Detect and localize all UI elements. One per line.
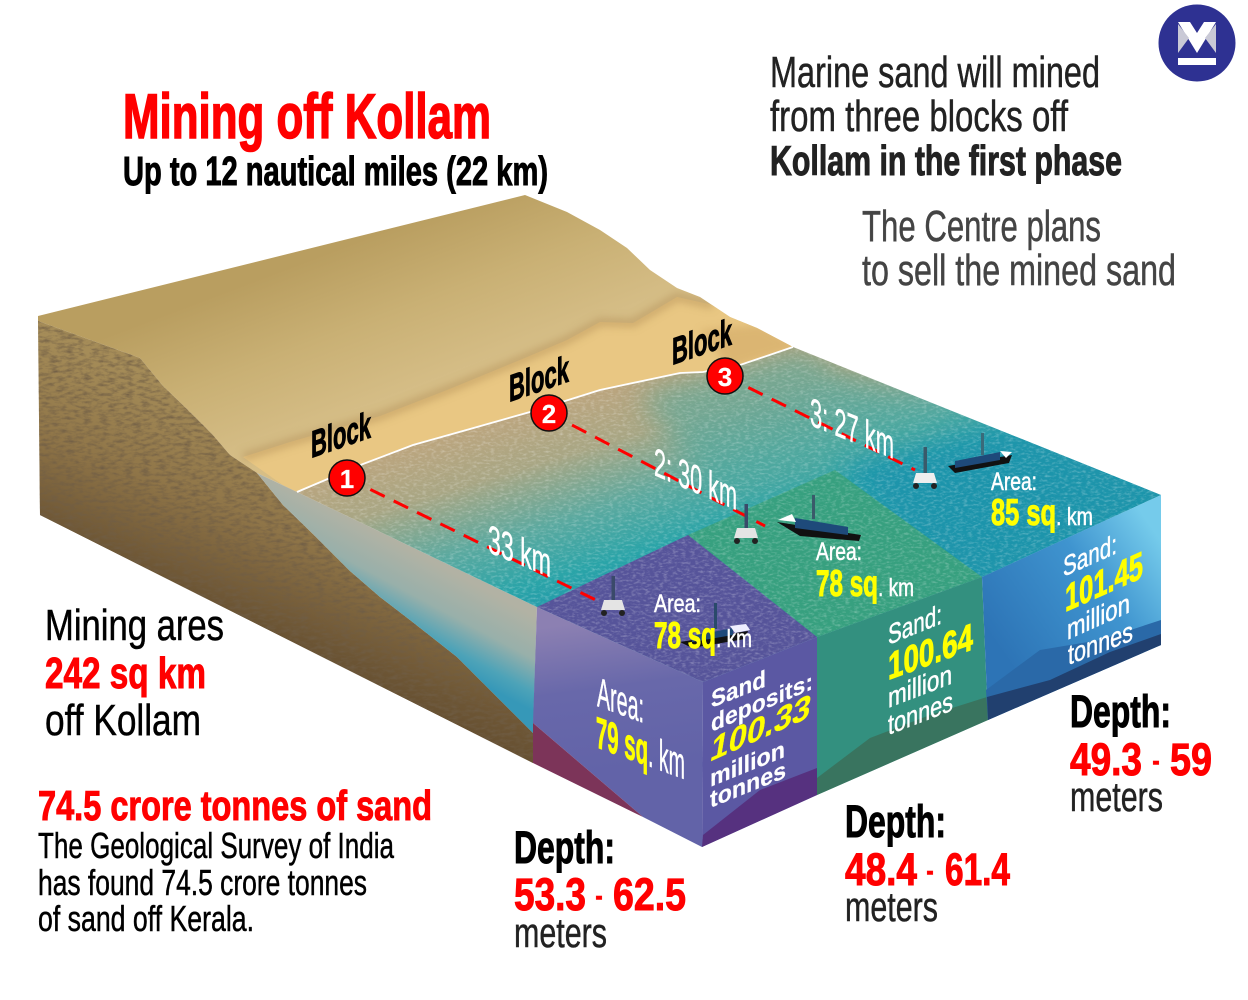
icon: ship 3	[948, 433, 1012, 473]
text block: sand estimate	[38, 782, 432, 939]
block marker 1: Block	[311, 404, 371, 467]
block 1 surface area: 78 sq	[654, 615, 716, 656]
block 2 front face	[817, 577, 988, 795]
block 1 sand deposits: deposits:	[711, 668, 813, 738]
icon: oil rig 3	[913, 447, 937, 489]
icon: ship 2	[777, 495, 861, 541]
block marker 1	[311, 404, 371, 496]
text block: first phase: Marine sand will mined	[770, 48, 1100, 97]
block 1 surface area: Area:	[654, 590, 701, 618]
distance label 1: 33 km	[488, 515, 551, 586]
depth: block 3: 49.3	[1070, 734, 1142, 785]
text block: sand estimate: The Geological Survey of India	[38, 825, 395, 866]
text block: first phase	[770, 48, 1122, 184]
block 3 sand deposits: 101.45	[1065, 544, 1143, 621]
block 1 surface area: . km	[716, 625, 752, 653]
block marker 2: 2	[542, 399, 556, 429]
depth: block 1: -	[595, 869, 603, 920]
shallow water cross-section	[257, 473, 537, 733]
block 3 front face	[982, 495, 1161, 720]
text block: mining area: Mining ares	[45, 601, 224, 650]
title: Mining off Kollam	[123, 82, 491, 152]
icon: ship 1	[680, 603, 750, 648]
block 1 front-right face	[702, 637, 817, 847]
block 1 front-left face	[533, 607, 703, 847]
block 3 surface area	[991, 468, 1093, 533]
depth: block 3	[1070, 686, 1212, 820]
depth: block 1: Depth:	[514, 822, 615, 873]
block marker 3: Block	[672, 311, 732, 374]
block 2 sand deposits: 100.64	[888, 615, 973, 689]
text block: first phase: Kollam in the first phase	[770, 137, 1122, 184]
depth: block 2: meters	[845, 883, 938, 930]
depth: block 3: 59	[1170, 734, 1212, 785]
icon: oil rig 1	[601, 576, 625, 616]
block 1 sand deposits: million	[710, 736, 785, 793]
text block: sand estimate: has found 74.5 crore tonnes	[38, 862, 367, 903]
text block: mining area	[45, 601, 224, 745]
soil cross-section	[38, 321, 533, 763]
block 2 surface area	[816, 538, 914, 604]
block 1 side area: 79 sq	[596, 707, 648, 776]
depth: block 2	[845, 796, 1010, 930]
block 3 sand deposits: million	[1067, 587, 1130, 647]
depth: block 3: meters	[1070, 773, 1163, 820]
distance label 2: 2: 30 km	[654, 439, 737, 519]
infographic: mining off Kollam: . km	[648, 726, 685, 789]
block marker 3	[672, 311, 743, 394]
text block: mining area: off Kollam	[45, 696, 201, 745]
block 2 sand deposits: million	[888, 659, 952, 715]
block 1 side area: Area:	[597, 669, 644, 733]
sea surface	[297, 347, 1161, 682]
block 3 surface area: 85 sq	[991, 492, 1056, 533]
block 1 sand deposits: tonnes	[710, 756, 786, 814]
shoreline foam	[297, 347, 793, 492]
block 2 surface area: . km	[878, 574, 914, 602]
depth: block 1	[514, 822, 686, 956]
depth: block 3: Depth:	[1070, 686, 1171, 737]
depth: block 1: 53.3	[514, 869, 586, 920]
block marker 2	[509, 348, 569, 431]
block 1 sand deposits	[708, 665, 814, 814]
seabed wedge	[533, 723, 643, 817]
distance line: block 2	[549, 413, 765, 526]
block marker 2: Block	[509, 348, 569, 411]
block marker 3: 3	[718, 362, 732, 392]
distance label 3: 3: 27 km	[810, 388, 894, 468]
terrain block	[30, 195, 1180, 847]
block 1 sand deposits: 100.33	[708, 685, 814, 770]
beach strip	[243, 297, 800, 495]
depth: block 2: 61.4	[945, 844, 1010, 895]
block 1 sand deposits: Sand	[711, 665, 766, 714]
block 2 surface area: 78 sq	[816, 563, 878, 604]
distance line: block 3	[725, 376, 915, 470]
text block: centre plans	[862, 202, 1176, 295]
text block: centre plans: The Centre plans	[862, 202, 1101, 251]
block 2 sand deposits	[888, 599, 973, 742]
block 2 surface area: Area:	[816, 538, 862, 566]
block 3 sand deposits	[1063, 528, 1143, 672]
block 2 sea surface	[688, 470, 982, 637]
block 2 sand deposits: Sand:	[888, 599, 942, 652]
block 3 surface area: . km	[1056, 503, 1093, 531]
block 1 sea surface	[537, 535, 817, 682]
logo	[1158, 4, 1236, 82]
text block: first phase: from three blocks off	[770, 92, 1069, 141]
block 3 surface area: Area:	[991, 468, 1037, 496]
text block: sand estimate: 74.5 crore tonnes of sand	[38, 782, 432, 829]
depth: block 1: meters	[514, 909, 607, 956]
sand slope	[38, 195, 793, 492]
depth: block 3: -	[1152, 734, 1160, 785]
depth: block 2: -	[926, 844, 934, 895]
subtitle: Up to 12 nautical miles (22 km)	[123, 148, 548, 194]
depth: block 1: 62.5	[613, 869, 686, 920]
text block: sand estimate: of sand off Kerala.	[38, 898, 254, 939]
depth: block 2: Depth:	[845, 796, 946, 847]
block 3 sand deposits: tonnes	[1068, 616, 1133, 672]
block 2 sand deposits: tonnes	[888, 686, 953, 742]
text block: mining area: 242 sq km	[45, 649, 206, 698]
distance line: block 1	[347, 478, 608, 606]
block 1 side area	[596, 669, 685, 789]
depth: block 2: 48.4	[845, 844, 917, 895]
block 3 sand deposits: Sand:	[1063, 528, 1117, 584]
block marker 1: 1	[340, 464, 354, 494]
icon: oil rig 2	[734, 504, 758, 544]
block 3 sea surface	[834, 416, 1161, 578]
block 1 surface area	[654, 590, 752, 656]
